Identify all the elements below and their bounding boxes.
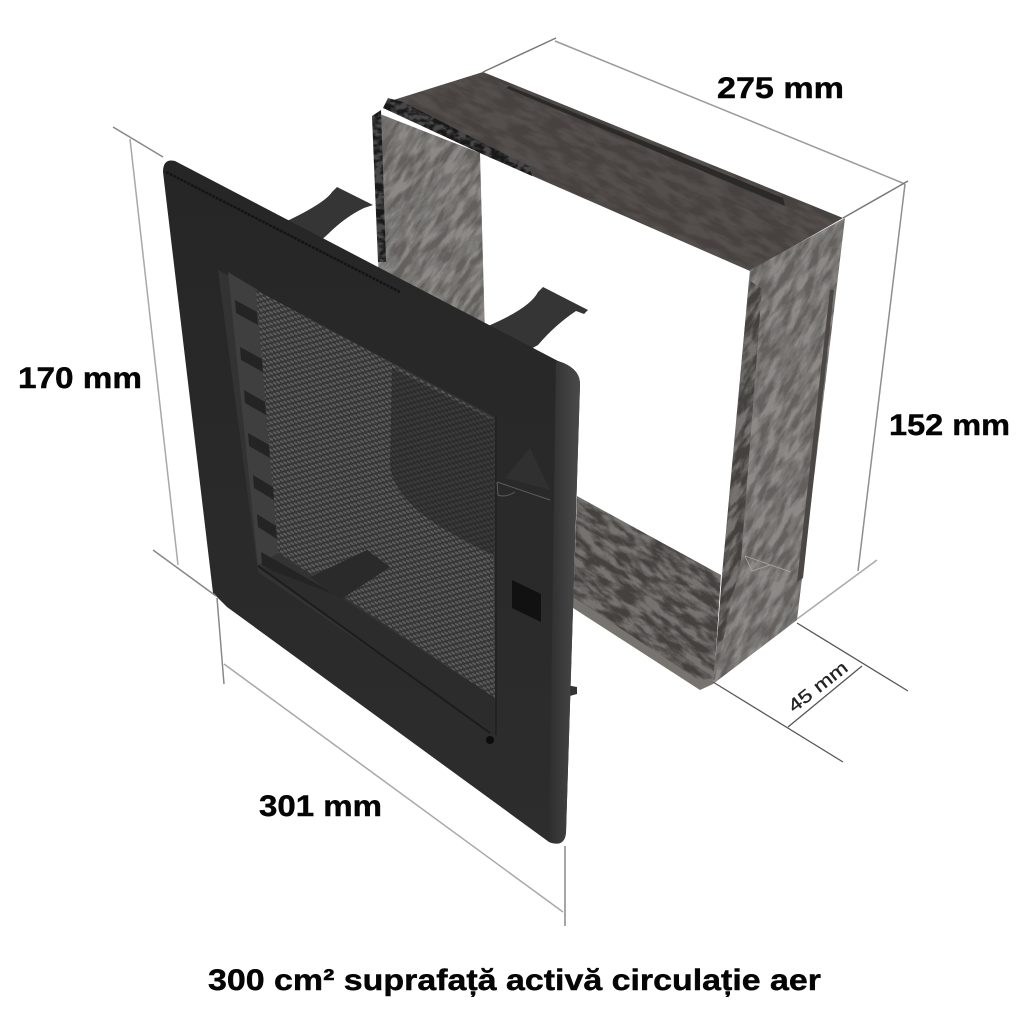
- mounting clip: upper: [285, 187, 373, 250]
- dimension lines: sleeve height 152 mm: [797, 184, 905, 619]
- label: 301 mm: 301 mm: [259, 790, 382, 823]
- mounting clip: lower: [488, 287, 588, 355]
- panel: lower window edge: [258, 566, 490, 733]
- label: 45 mm: 45 mm: [784, 657, 852, 716]
- sleeve: left column: [378, 114, 485, 323]
- dimension lines: panel width 301 mm: [217, 598, 565, 926]
- caption: active surface: 300 cm² suprafață activă circulație aer: [208, 964, 821, 997]
- sleeve: bottom lip: [573, 597, 713, 690]
- dimension lines: panel height 170 mm: [113, 127, 216, 596]
- sleeve: bottom face: [574, 496, 721, 681]
- dimension lines: sleeve flange 45 mm: [713, 623, 908, 762]
- sleeve: top slot: [506, 86, 785, 206]
- panel: screw: [486, 736, 494, 744]
- sleeve: top dark rim: [383, 98, 532, 176]
- panel: frame: [163, 160, 580, 844]
- metal sleeve: [117, 72, 908, 884]
- front grille panel: [163, 160, 580, 844]
- panel: top dotted edge: [166, 172, 400, 292]
- sleeve: right inner band: [714, 280, 762, 682]
- panel: lower recess shadow: [258, 565, 495, 738]
- panel: window recess: [218, 270, 495, 735]
- label: 275 mm: 275 mm: [717, 72, 844, 105]
- panel: shadow behind mesh: [390, 368, 495, 556]
- dimension lines: sleeve depth 275 mm: [483, 38, 908, 218]
- sleeve: faint mark: [745, 556, 791, 572]
- panel: louvre track: [228, 272, 280, 565]
- label: 152 mm: 152 mm: [889, 409, 1010, 442]
- panel: louvres: [235, 300, 340, 607]
- sleeve: right column: [713, 218, 845, 684]
- sleeve: right slot: [797, 290, 834, 582]
- panel: faint handle shape: [505, 448, 550, 490]
- label: 170 mm: 170 mm: [18, 362, 142, 395]
- panel: right side band: [549, 361, 580, 844]
- panel: faint handle mark: [497, 482, 550, 500]
- panel: window right edge: [495, 417, 497, 735]
- panel: damper slider window: [512, 580, 541, 622]
- panel: clip seen through mesh: [310, 550, 390, 600]
- panel: rear peg: [566, 685, 577, 697]
- sleeve: top face: [394, 72, 843, 271]
- sleeve: left dark edge: [372, 110, 386, 262]
- panel: mesh: [256, 290, 495, 698]
